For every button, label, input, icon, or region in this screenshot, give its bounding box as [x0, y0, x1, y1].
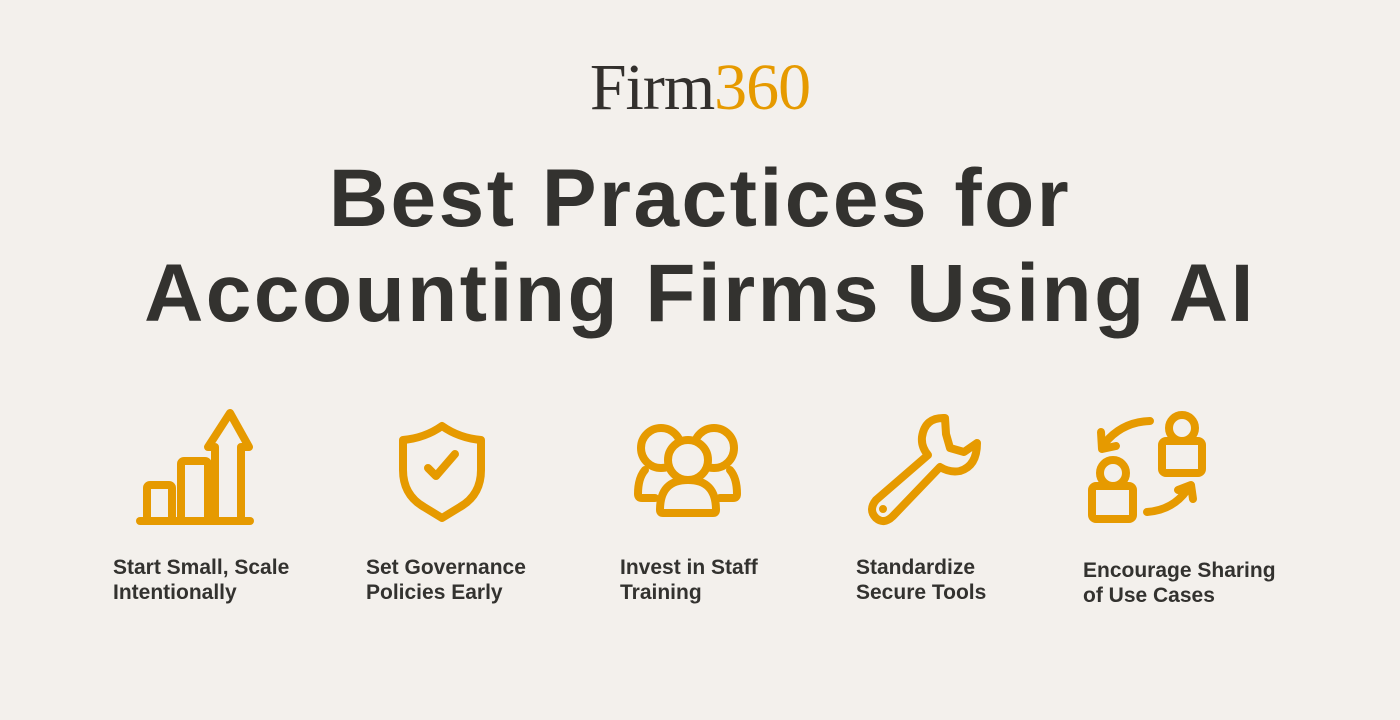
label 5: of Use Cases	[1083, 584, 1215, 607]
label 5	[1083, 559, 1276, 607]
icon: shield check	[403, 426, 481, 518]
icon: team	[638, 428, 737, 513]
icon: sharing	[1092, 415, 1202, 519]
label 2: Set Governance	[366, 556, 526, 579]
label 1	[113, 556, 289, 604]
label 4: Standardize	[856, 556, 975, 579]
logo: Firm360	[590, 51, 810, 124]
label 3: Training	[620, 581, 702, 604]
label 1: Intentionally	[113, 581, 237, 604]
label 2: Policies Early	[366, 581, 503, 604]
label 3: Invest in Staff	[620, 556, 758, 579]
label 1: Start Small, Scale	[113, 556, 289, 579]
title: Accounting Firms Using AI	[144, 248, 1256, 339]
title	[144, 153, 1256, 339]
icon: growth chart	[140, 413, 250, 521]
icon: wrench	[872, 418, 977, 521]
label 3	[620, 556, 758, 604]
label 4	[856, 556, 986, 604]
label 2	[366, 556, 526, 604]
title: Best Practices for	[329, 153, 1071, 244]
label 4: Secure Tools	[856, 581, 986, 604]
label 5: Encourage Sharing	[1083, 559, 1276, 582]
